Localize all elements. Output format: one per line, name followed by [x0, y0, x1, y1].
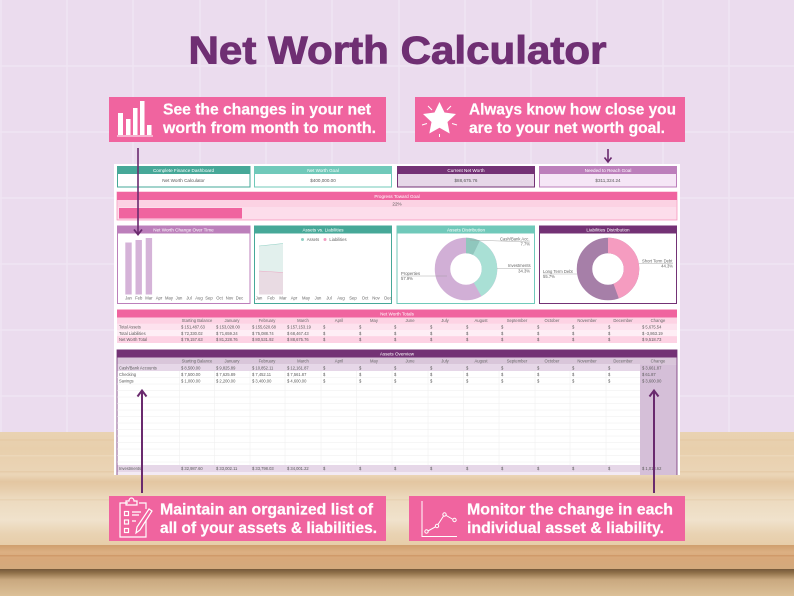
month axis labels: Feb [135, 296, 143, 300]
chart panel: net worth change over time [117, 226, 250, 304]
donut labels: 7.7% [520, 242, 530, 246]
column headers: February [259, 358, 276, 364]
progress toward goal bar: 22% [392, 202, 402, 206]
row: investments: $ [537, 466, 540, 471]
row: savings: $ [537, 378, 540, 383]
row: net worth total: $ 81,228.76 [216, 337, 238, 342]
column headers: February [259, 318, 276, 323]
row: total assets [119, 324, 662, 330]
row: total assets: $ [466, 324, 469, 330]
row: cash/bank accounts: $ [501, 365, 504, 370]
column headers: August [474, 318, 488, 323]
donut [442, 246, 490, 292]
row: net worth total: $ [608, 337, 611, 342]
row: total assets: $ 151,487.63 [181, 324, 206, 330]
donut labels [543, 258, 673, 279]
row: investments: $ 34,001.22 [287, 466, 309, 471]
row: net worth total: $ [501, 337, 504, 342]
donut labels: Short Term Debt [642, 258, 673, 264]
background: wooden table [0, 432, 794, 596]
icon: bar chart [117, 101, 153, 136]
KPI card: needed to reach goal: Needed to Reach Goal [585, 168, 631, 173]
month axis labels: Nov [372, 296, 381, 300]
arrow: to needed to reach goal [604, 149, 612, 162]
row: total liabilities: $ 75,088.74 [252, 331, 274, 336]
row: total liabilities: $ [430, 331, 433, 336]
row: checking: $ 7,625.89 [216, 372, 236, 377]
column headers: Change [651, 318, 666, 323]
title: Net Worth Calculator [188, 30, 606, 72]
chart panel: assets distribution donut [396, 226, 535, 304]
row: savings: $ [466, 378, 469, 383]
progress toward goal bar: Progress Toward Goal [374, 194, 420, 199]
column headers: June [405, 318, 415, 323]
row: net worth total: $ 79,157.63 [181, 337, 203, 342]
donut labels: 44.3% [661, 264, 673, 268]
month axis labels: Jan [256, 296, 263, 300]
chart panel: liabilities distribution donut [539, 226, 677, 304]
KPI card: current net worth: $88,675.76 [454, 178, 478, 183]
month axis labels: Aug [195, 296, 203, 300]
row: checking: $ [359, 372, 362, 377]
row: total liabilities: $ [537, 331, 540, 336]
column headers: June [405, 358, 415, 364]
row: checking: $ 7,452.11 [252, 372, 272, 377]
row: investments: Investments [119, 466, 141, 471]
row: cash/bank accounts: $ [359, 365, 362, 370]
row: investments: $ 33,798.03 [252, 466, 274, 471]
row: net worth total: $ [430, 337, 433, 342]
row: investments [119, 466, 662, 471]
column headers: September [507, 358, 528, 364]
month axis labels: Sep [349, 296, 357, 300]
row: investments: $ [323, 466, 326, 471]
callout: month to month changes [109, 97, 386, 142]
callout: organized list [109, 496, 386, 541]
month axis labels: Oct [216, 296, 224, 300]
row: savings: $ 4,600.00 [287, 378, 307, 383]
row: savings: $ 3,400.00 [252, 378, 272, 383]
row: savings: $ [359, 378, 362, 383]
column headers: April [335, 358, 343, 364]
KPI card: current net worth: Current Net Worth [447, 168, 485, 173]
callout: individual change: individual asset & liability. [467, 520, 664, 537]
month axis labels: Dec [236, 296, 243, 300]
row: cash/bank accounts: $ [394, 365, 397, 370]
column headers: October [545, 318, 560, 323]
column headers: January [225, 318, 240, 323]
column headers: May [370, 358, 379, 364]
row: investments: $ [608, 466, 611, 471]
row: total assets: $ [430, 324, 433, 330]
row: savings: $ [430, 378, 433, 383]
column headers: July [441, 358, 450, 364]
column headers: April [335, 318, 343, 323]
row: savings: $ [501, 378, 504, 383]
row: checking: $ [394, 372, 397, 377]
row: net worth total: $ [394, 337, 397, 342]
row: investments: $ [572, 466, 575, 471]
donut labels: 57.9% [401, 276, 413, 281]
row: checking: $ 61.87 [642, 372, 656, 377]
icon: clipboard checklist [120, 498, 152, 537]
chart panel: liabilities distribution donut: Liabilities Distribution [586, 228, 630, 232]
legend: Assets [307, 237, 319, 242]
KPI card: net worth goal: Net Worth Goal [307, 168, 339, 173]
month axis labels: Mar [279, 296, 287, 300]
row: total assets: $ [501, 324, 504, 330]
KPI card: net worth goal: $400,000.00 [310, 178, 336, 183]
row: checking [119, 372, 656, 377]
column headers: December [613, 318, 633, 323]
row: cash/bank accounts: $ 3,661.87 [642, 365, 662, 370]
month axis labels: May [302, 296, 311, 300]
row: total liabilities: $ [323, 331, 326, 336]
row: total liabilities: $ [466, 331, 469, 336]
month axis labels: Jul [186, 296, 192, 300]
row: total assets: $ [323, 324, 326, 330]
icon: line graph [422, 501, 457, 536]
row: savings: $ [572, 378, 575, 383]
row: total liabilities: $ [501, 331, 504, 336]
row: savings: $ 1,000.00 [181, 378, 201, 383]
row: investments: $ [430, 466, 433, 471]
row: total liabilities: $ [608, 331, 611, 336]
progress toward goal bar [117, 192, 677, 220]
row: checking: $ 7,561.87 [287, 372, 307, 377]
row: total liabilities: $ 68,467.43 [287, 331, 309, 336]
chart panel: assets vs liabilities [254, 226, 392, 304]
column headers: May [370, 318, 379, 323]
table: net worth totals: Net Worth Totals [380, 312, 415, 316]
column headers: Change [651, 358, 666, 364]
month axis labels [256, 296, 392, 300]
row: total liabilities: $ 71,659.24 [216, 331, 238, 336]
row: net worth total: $ 9,518.73 [642, 337, 662, 342]
arrow: up to asset list [138, 390, 146, 493]
table: assets overview: Assets Overview [380, 352, 415, 356]
row: total liabilities: $ 72,330.02 [181, 331, 203, 336]
row: cash/bank accounts: $ 12,161.87 [287, 365, 309, 370]
chart panel: assets vs liabilities: Assets vs. Liabilities [302, 228, 344, 232]
table: net worth totals [117, 310, 677, 343]
row: cash/bank accounts [119, 365, 662, 370]
row: net worth total: $ [466, 337, 469, 342]
row: total liabilities: $ [359, 331, 362, 336]
row: checking: Checking [119, 372, 137, 377]
row: investments: $ [394, 466, 397, 471]
callout: month to month changes: worth from month to month. [162, 120, 376, 137]
row: cash/bank accounts: $ [323, 365, 326, 370]
row: cash/bank accounts: $ [430, 365, 433, 370]
table: assets overview [117, 350, 677, 475]
row: savings: Savings [119, 378, 134, 383]
month axis labels: Jun [315, 296, 322, 300]
row: investments: $ 32,987.60 [181, 466, 203, 471]
row: investments: $ 1,013.62 [642, 466, 662, 471]
row: total liabilities: $ -3,863.19 [642, 331, 663, 336]
KPI card: net worth goal [254, 166, 392, 187]
row: checking: $ [537, 372, 540, 377]
donut labels: 34.3% [518, 268, 530, 274]
row: savings [119, 378, 662, 383]
month axis labels: Feb [267, 296, 275, 300]
column headers: Starting Balance [182, 318, 213, 323]
column headers: December [613, 358, 633, 364]
column headers: August [474, 358, 488, 364]
row: savings: $ [323, 378, 326, 383]
row: cash/bank accounts: $ 9,825.89 [216, 365, 236, 370]
bars [125, 238, 152, 294]
month axis labels: Jan [125, 296, 133, 300]
row: total liabilities: Total Liabilities [119, 331, 146, 336]
row: total assets: Total Assets [119, 324, 141, 330]
callout: net worth goal: are to your net worth goal. [469, 120, 665, 137]
row: investments: $ [501, 466, 504, 471]
month axis labels: Dec [384, 296, 392, 300]
spreadsheet sheet [114, 164, 680, 475]
row: checking: $ [466, 372, 469, 377]
row: net worth total [119, 337, 662, 342]
column headers: November [577, 318, 597, 323]
row: total liabilities: $ [572, 331, 575, 336]
month axis labels: Apr [291, 296, 298, 300]
background: lavender grid wall [0, 0, 794, 433]
month axis labels: Apr [156, 296, 163, 300]
callout: individual change [409, 496, 685, 541]
callout: month to month changes: See the changes in your net [163, 102, 371, 118]
column headers: September [507, 318, 528, 323]
row: net worth total: $ 80,531.92 [252, 337, 274, 342]
row: total assets: $ [359, 324, 362, 330]
KPI card: dashboard [117, 166, 250, 187]
donut labels: Cash/Bank Acc. [500, 236, 530, 242]
row: checking: $ 7,500.00 [181, 372, 201, 377]
donut labels: Properties [401, 271, 420, 276]
row: total assets: $ [394, 324, 397, 330]
row: total assets: $ 5,675.54 [642, 324, 662, 330]
row: total liabilities: $ [394, 331, 397, 336]
month axis labels: Jul [326, 296, 332, 300]
KPI card: dashboard: Net Worth Calculator [162, 178, 205, 183]
donut [584, 246, 632, 292]
KPI card: current net worth [397, 166, 535, 187]
row: checking: $ [572, 372, 575, 377]
column headers: July [441, 318, 450, 323]
row: checking: $ [501, 372, 504, 377]
callout: net worth goal: Always know how close you [469, 102, 676, 118]
row: cash/bank accounts: $ [608, 365, 611, 370]
row: cash/bank accounts: Cash/Bank Accounts [119, 365, 157, 370]
row: checking: $ [608, 372, 611, 377]
donut labels: 55.7% [543, 274, 555, 279]
callout: net worth goal [415, 97, 685, 142]
month axis labels: Sep [205, 296, 213, 300]
month axis labels: May [165, 296, 174, 300]
column headers: March [297, 318, 309, 323]
row: savings: $ 3,600.00 [642, 378, 662, 383]
row: cash/bank accounts: $ [572, 365, 575, 370]
donut labels [401, 236, 531, 281]
row: total assets: $ 155,620.68 [252, 324, 277, 330]
row: net worth total: Net Worth Total [119, 337, 147, 342]
month axis labels: Jun [176, 296, 183, 300]
donut labels: Long Term Debt [543, 269, 574, 274]
row: net worth total: $ [323, 337, 326, 342]
column headers: March [297, 358, 309, 364]
stacked area [259, 244, 283, 294]
row: total assets: $ 157,153.19 [287, 324, 312, 330]
callout: individual change: Monitor the change in each [467, 502, 673, 518]
row: net worth total: $ [537, 337, 540, 342]
row: total assets: $ [537, 324, 540, 330]
row: net worth total: $ [359, 337, 362, 342]
KPI card: needed to reach goal: $311,324.24 [595, 178, 621, 183]
legend: Liabilities [329, 237, 347, 242]
month axis labels [125, 296, 243, 300]
row: checking: $ [430, 372, 433, 377]
chart panel: net worth change over time: Net Worth Change Over Time [153, 228, 214, 232]
column headers: January [225, 358, 240, 364]
row: cash/bank accounts: $ 8,500.00 [181, 365, 201, 370]
row: cash/bank accounts: $ [537, 365, 540, 370]
row: investments: $ [359, 466, 362, 471]
row: total liabilities [119, 331, 663, 336]
legend [301, 237, 347, 242]
row: net worth total: $ 88,675.76 [287, 337, 309, 342]
KPI card: dashboard: Complete Finance Dashboard [153, 168, 214, 173]
callout: organized list: all of your assets & liabilities. [160, 520, 377, 537]
column headers: Starting Balance [182, 358, 213, 364]
month axis labels: Nov [226, 296, 234, 300]
column headers [182, 318, 666, 323]
month axis labels: Aug [337, 296, 345, 300]
column headers [182, 358, 666, 364]
row: checking: $ [323, 372, 326, 377]
row: total assets: $ 153,028.00 [216, 324, 241, 330]
month axis labels: Oct [362, 296, 369, 300]
callout: organized list: Maintain an organized list of [160, 502, 374, 518]
month axis labels: Mar [145, 296, 153, 300]
row: cash/bank accounts: $ 10,852.11 [252, 365, 274, 370]
column headers: November [577, 358, 597, 364]
column headers: October [545, 358, 560, 364]
arrow: to net worth chart [134, 148, 142, 234]
row: savings: $ 2,200.00 [216, 378, 236, 383]
row: savings: $ [608, 378, 611, 383]
row: net worth total: $ [572, 337, 575, 342]
icon: star [422, 102, 457, 137]
row: savings: $ [394, 378, 397, 383]
arrow: up to change column [650, 390, 658, 493]
donut labels: Investments [508, 263, 531, 268]
row: cash/bank accounts: $ [466, 365, 469, 370]
row: total assets: $ [572, 324, 575, 330]
row: investments: $ [466, 466, 469, 471]
KPI card: needed to reach goal [539, 166, 677, 187]
chart panel: assets distribution donut: Assets Distribution [447, 228, 485, 232]
row: investments: $ 33,002.11 [216, 466, 238, 471]
row: total assets: $ [608, 324, 611, 330]
